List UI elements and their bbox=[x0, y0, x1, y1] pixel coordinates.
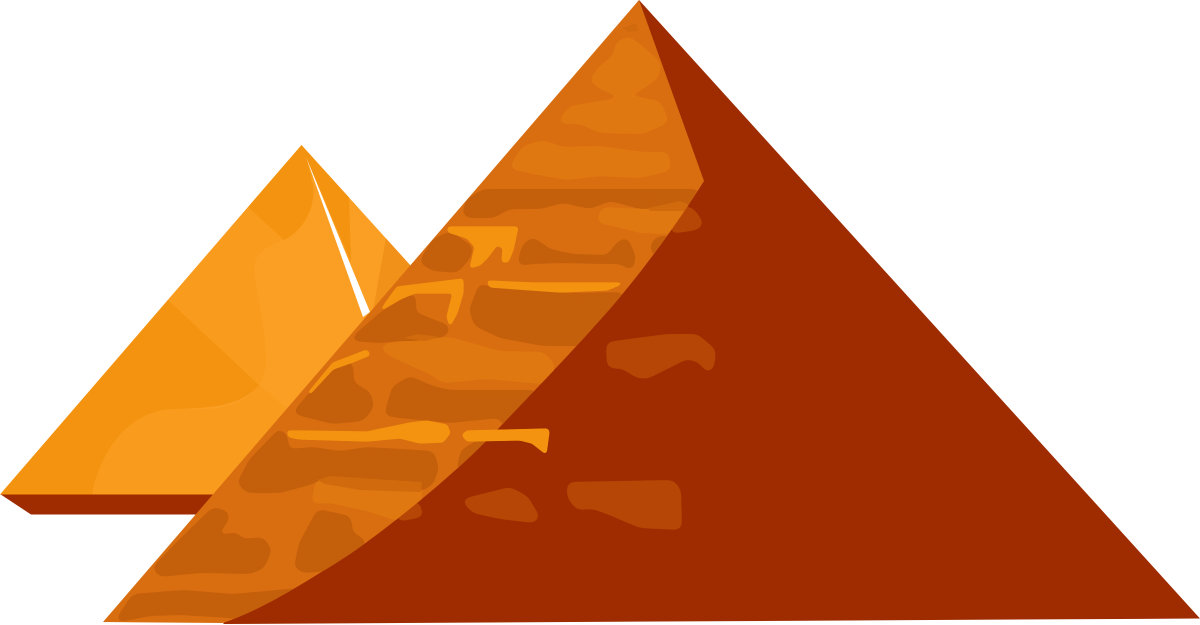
sunlit face: stone patches bbox=[115, 23, 700, 622]
large pyramid: sunlit face bbox=[103, 0, 704, 623]
small pyramid: light face bbox=[0, 145, 420, 494]
small pyramid: white sliver bbox=[306, 157, 370, 317]
small pyramid bbox=[0, 145, 420, 514]
small pyramid: shaded patches bbox=[0, 145, 420, 494]
small pyramid: base slab bbox=[0, 494, 215, 514]
shadow side: stone patches bbox=[397, 205, 715, 529]
dark stones bbox=[115, 190, 700, 622]
dotted stone bands bbox=[317, 23, 690, 492]
bright highlight strokes bbox=[287, 227, 624, 454]
light stones bbox=[312, 37, 689, 520]
